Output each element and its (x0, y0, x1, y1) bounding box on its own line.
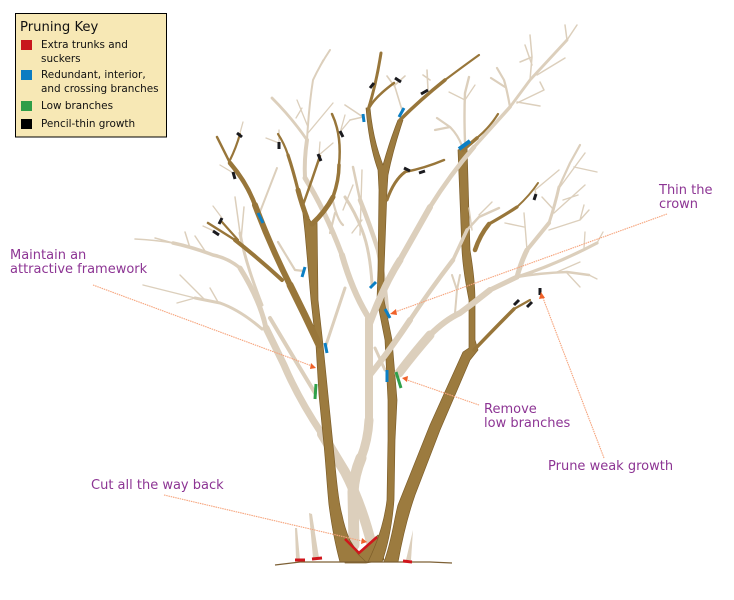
twigs from right trunk top (435, 118, 462, 146)
key item: extra trunks: suckers (41, 53, 81, 65)
large lower right branch (399, 335, 430, 373)
centre interior light branches (360, 200, 387, 312)
lower interior twig (375, 348, 385, 370)
arrow: cut all the way back (164, 495, 367, 544)
blue cuts (258, 108, 470, 382)
middle trunk (366, 108, 403, 562)
arrow: remove low branches (402, 376, 479, 405)
left trunk upper arm (298, 190, 307, 218)
main crown branch (369, 260, 400, 325)
right lower small twig (452, 275, 460, 313)
shrub illustration (135, 25, 603, 565)
unpruned light branches behind trunks (135, 50, 597, 546)
central light trunk lower (353, 458, 361, 545)
label: cut all the way back: Cut all the way back (91, 478, 224, 493)
upper left light branch (342, 255, 367, 315)
light branches in front of trunks (369, 25, 603, 375)
arrow: maintain framework (93, 285, 316, 369)
key item: extra trunks: Extra trunks and (41, 39, 128, 51)
right trunk (384, 146, 478, 562)
label: prune weak growth: Prune weak growth (548, 459, 673, 474)
arrow: prune weak growth (539, 292, 604, 458)
suckers (295, 513, 413, 560)
key item: extra trunks (21, 39, 128, 65)
left trunk (302, 205, 366, 562)
key item: redundant branches: Redundant, interior, (41, 69, 146, 81)
label: thin the crown: Thin the (659, 183, 712, 198)
arrow: thin the crown (390, 214, 667, 315)
top twigs (345, 70, 430, 120)
green cuts (315, 372, 401, 399)
label: remove low branches: low branches (484, 416, 571, 431)
label: maintain framework: Maintain an (10, 248, 86, 263)
pruned brown trunks and limbs (208, 53, 538, 563)
small twigs upper left (258, 168, 277, 217)
label: remove low branches: Remove (484, 402, 537, 417)
label: thin the crown: crown (659, 197, 698, 212)
panel: pruning key (16, 14, 166, 137)
right trunk branches (474, 309, 514, 350)
key item: redundant branches: and crossing branches (41, 83, 159, 95)
crossing light trunk to the left (322, 434, 372, 546)
key item: pencil-thin growth: Pencil-thin growth (41, 118, 135, 130)
pruning cut markers (213, 78, 540, 562)
right fan branch (517, 250, 527, 277)
red cuts (295, 537, 412, 562)
left limb (290, 285, 319, 345)
interior right branch (370, 320, 410, 375)
label: maintain framework: attractive framework (10, 262, 148, 277)
left trunk right arm (312, 197, 333, 224)
trunk base (340, 525, 384, 563)
key heading: Pruning Key (20, 20, 99, 35)
key item: low branches: Low branches (41, 100, 113, 112)
middle trunk branches (368, 53, 381, 110)
ground line (275, 562, 452, 565)
key item: redundant branches (21, 69, 159, 95)
black cuts (213, 78, 540, 307)
